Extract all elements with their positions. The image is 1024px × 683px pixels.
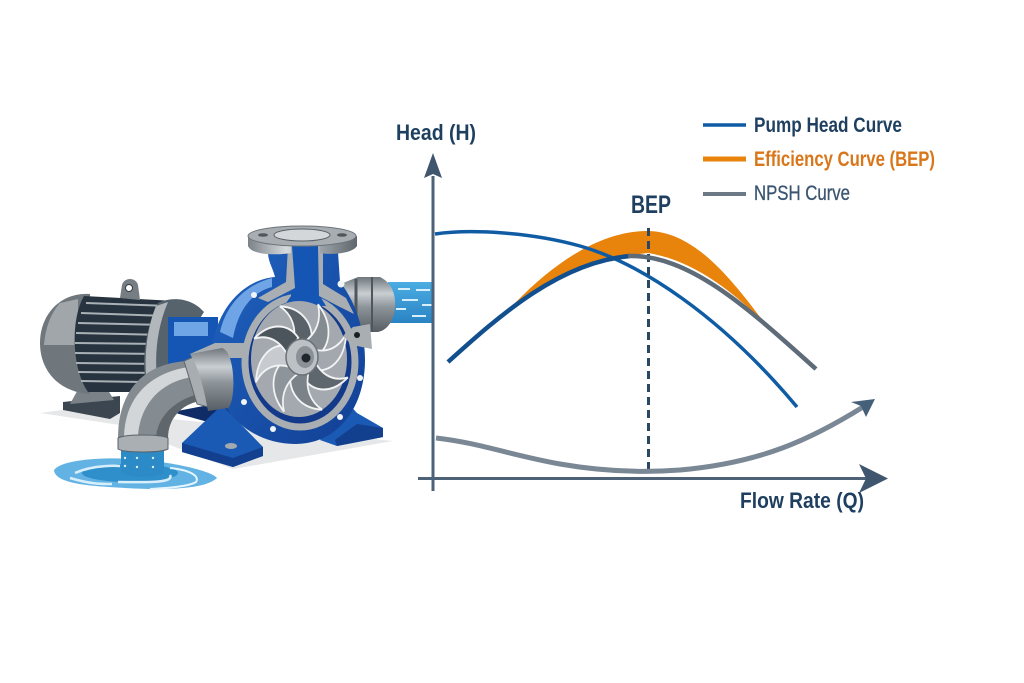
horizontal axis bbox=[418, 464, 888, 493]
x axis label: Flow Rate (Q) bbox=[740, 488, 864, 513]
legend bbox=[703, 114, 935, 205]
electric motor bbox=[40, 279, 204, 419]
motor collar bbox=[144, 299, 204, 392]
left wall step bbox=[190, 343, 248, 358]
legend: NPSH: NPSH Curve bbox=[754, 182, 850, 205]
efficiency band bbox=[515, 231, 763, 321]
vertical axis bbox=[424, 153, 442, 491]
BEP dashed line bbox=[647, 228, 650, 472]
outlet pipe bbox=[338, 277, 395, 332]
motor end cap bbox=[40, 294, 90, 394]
suction elbow pipe bbox=[118, 348, 233, 452]
legend: efficiency: Efficiency Curve (BEP) bbox=[754, 148, 935, 171]
outlet water stream bbox=[388, 282, 432, 323]
performance chart bbox=[396, 120, 888, 513]
efficiency curve falling segment bbox=[628, 256, 816, 369]
blue mounting feet bbox=[182, 400, 383, 467]
shaft coupling bbox=[168, 317, 218, 377]
dark shadow under suction pipe bbox=[172, 400, 260, 424]
lifting eye bbox=[120, 279, 140, 300]
suction strainer bbox=[121, 450, 164, 477]
impeller hub bbox=[286, 339, 318, 375]
suction collar bbox=[118, 435, 168, 452]
discharge neck bbox=[284, 244, 326, 306]
NPSH arrowhead bbox=[851, 399, 875, 417]
pump illustration bbox=[40, 226, 432, 489]
ground shadow bbox=[40, 409, 393, 469]
y axis label: Head (H) bbox=[396, 120, 476, 145]
efficiency curve rising segment bbox=[448, 256, 630, 362]
motor ribbed body bbox=[75, 296, 175, 392]
impeller bbox=[251, 301, 348, 417]
grey volute ring bbox=[245, 297, 355, 427]
BEP label: BEP bbox=[631, 191, 671, 219]
NPSH curve bbox=[436, 407, 863, 471]
pump head curve bbox=[435, 232, 797, 407]
water pool bbox=[54, 458, 217, 489]
suction flange bbox=[184, 355, 212, 408]
legend: pump head: Pump Head Curve bbox=[754, 114, 902, 137]
motor base bbox=[63, 396, 120, 419]
casing bolts bbox=[241, 280, 363, 432]
volute casing bbox=[190, 244, 365, 444]
discharge flange bbox=[248, 226, 372, 349]
